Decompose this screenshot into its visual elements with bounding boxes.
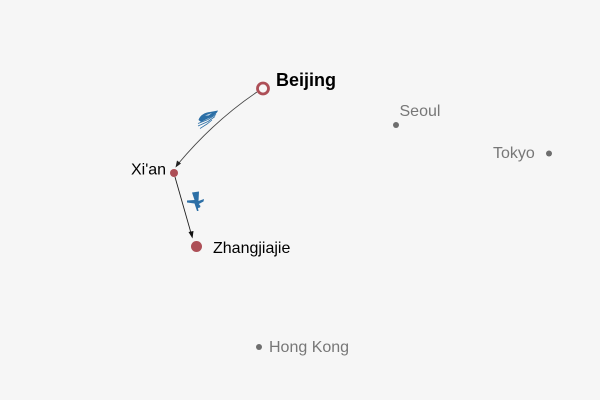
marker: Zhangjiajie (191, 241, 202, 252)
arrow: Xi'an to Zhangjiajie (175, 177, 194, 238)
label: Zhangjiajie: Zhangjiajie (213, 240, 290, 257)
marker: Xi'an (170, 169, 178, 177)
label: Beijing: Beijing (276, 70, 336, 90)
marker: Tokyo (546, 150, 552, 156)
marker: Hong Kong (256, 344, 262, 350)
marker: Beijing (258, 83, 268, 94)
icon: train (198, 110, 218, 128)
label: Hong Kong: Hong Kong (269, 339, 349, 356)
label: Tokyo: Tokyo (493, 145, 535, 162)
label: Seoul: Seoul (400, 103, 440, 120)
arrow: Beijing to Xi'an (176, 92, 257, 168)
label: Xi'an: Xi'an (131, 162, 166, 178)
icon: plane (187, 192, 204, 211)
marker: Seoul (393, 122, 399, 128)
